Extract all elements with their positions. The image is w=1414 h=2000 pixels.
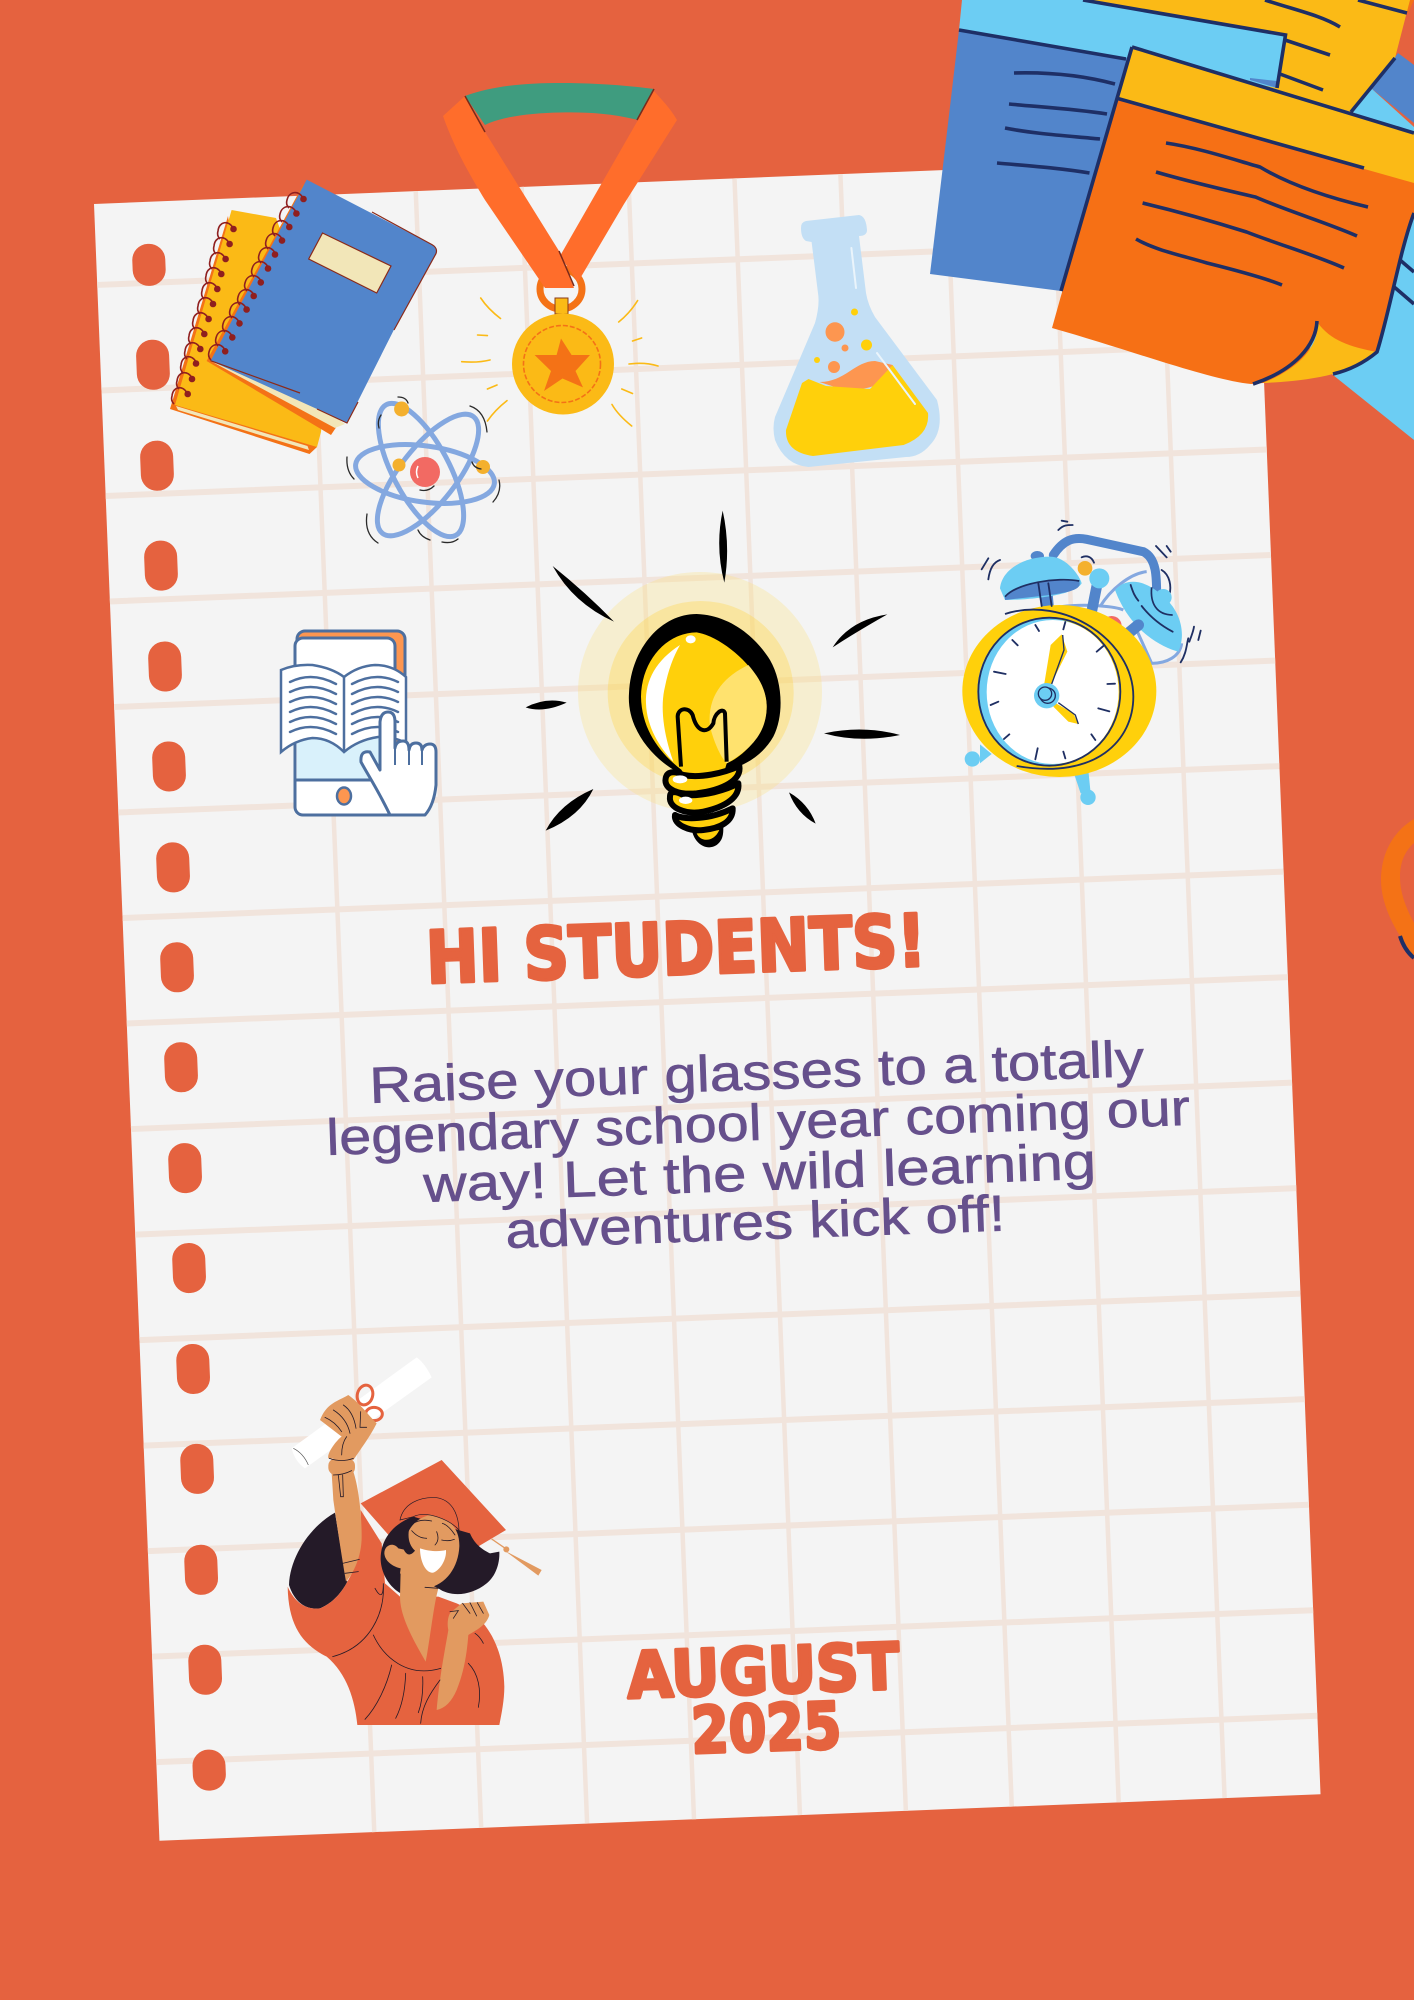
date text: 2025 <box>690 1690 842 1769</box>
diploma scroll <box>292 1357 432 1468</box>
icon: tablet with open book and pointing hand <box>281 631 436 815</box>
text block: message: legendary school year coming our <box>325 1079 1191 1166</box>
text block: message: Raise your glasses to a totally <box>368 1030 1145 1114</box>
panel: notebook paper <box>94 158 1321 1841</box>
text block: message: adventures kick off! <box>504 1185 1006 1259</box>
icon: sticky notes stack <box>930 0 1414 440</box>
icon: glowing light bulb <box>526 511 900 847</box>
icon: medal with ribbon <box>443 83 677 426</box>
title: HI STUDENTS! <box>425 899 927 1000</box>
illustration: graduate student <box>288 1357 542 1725</box>
icon: partial orange ring at right edge <box>1381 819 1414 958</box>
text block: message: way! Let the wild learning <box>421 1133 1097 1213</box>
icon: spiral notebooks <box>170 180 436 454</box>
icon: alarm clock <box>962 521 1201 805</box>
date text <box>626 1631 901 1769</box>
text block: message <box>325 1030 1191 1259</box>
icon: atom <box>347 392 500 551</box>
icon: chemistry flask <box>774 215 940 467</box>
date text: AUGUST <box>626 1631 901 1714</box>
